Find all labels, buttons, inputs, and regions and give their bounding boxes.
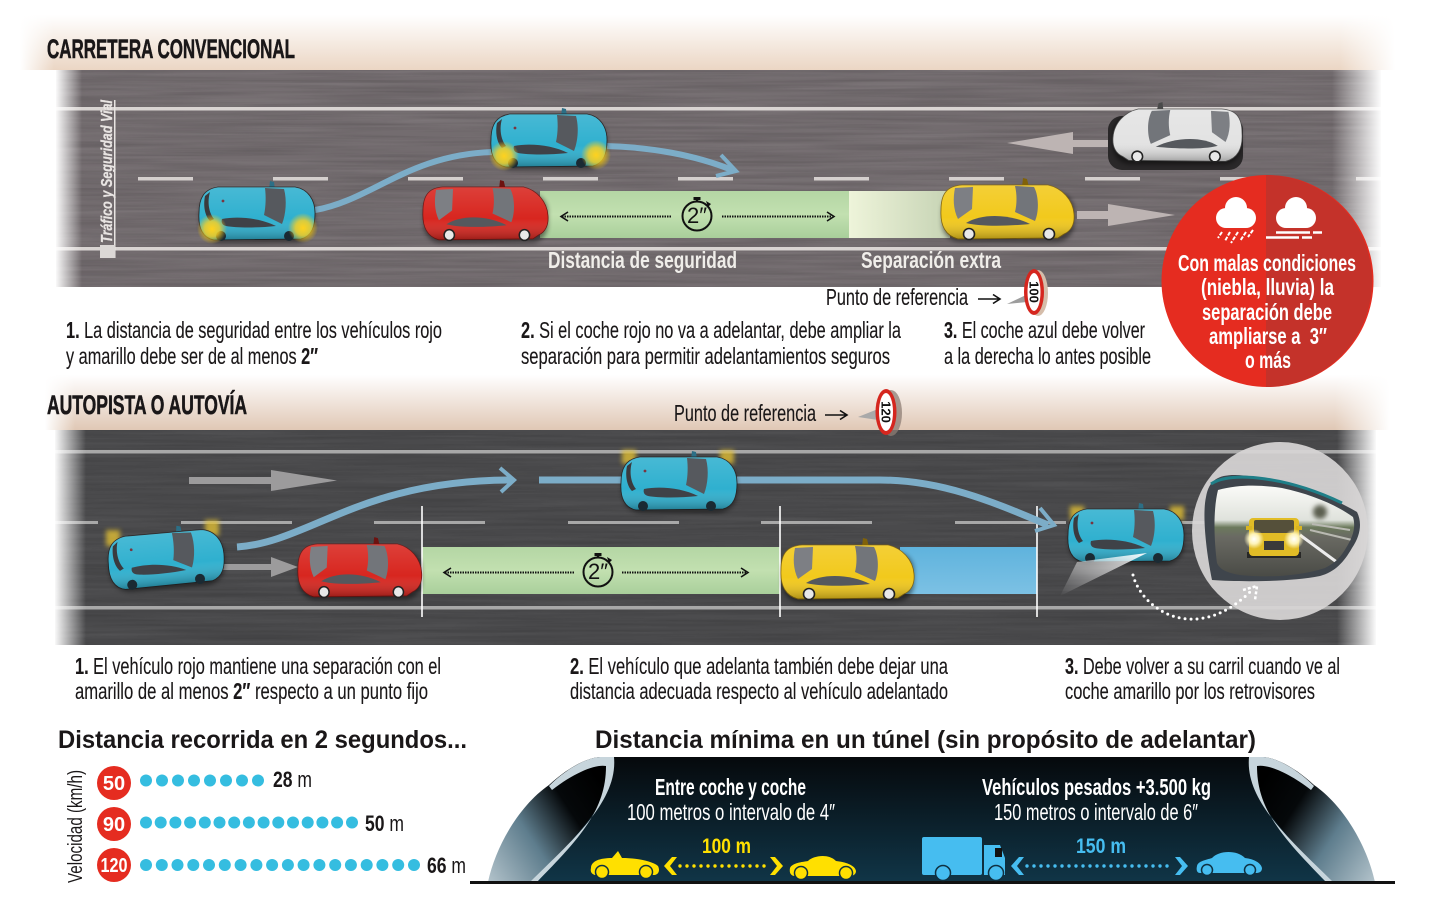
credit: Tráfico y Seguridad Vial: Tráfico y Seguridad Vial: [99, 99, 116, 243]
tunnel text: heavy vehicles: [982, 774, 1211, 825]
car: yellow, motorway: [781, 538, 914, 602]
indicator glows: [106, 450, 1184, 546]
reference lines: [422, 506, 1037, 617]
road section: carretera convencional: [20, 15, 1395, 287]
step 1: 1. La distancia de seguridad entre los vehículos rojo: [66, 317, 442, 343]
blue overtaking path: motorway: [237, 468, 1054, 547]
safety distance zone: [540, 191, 950, 238]
callout text: ampliarse a 3″: [1209, 323, 1327, 349]
callout text: (niebla, lluvia) la: [1201, 274, 1334, 300]
tunnel text: heavy vehicles: Vehículos pesados +3.500 kg: [982, 774, 1211, 800]
chart row: 50 km/h: [97, 766, 312, 800]
callout text: separación debe: [1202, 299, 1332, 325]
step 3: 3. Debe volver a su carril cuando ve al: [1065, 653, 1340, 679]
reference point: sign 100: 100: [1026, 281, 1042, 303]
tunnel text: cars: 100 metros o intervalo de 4″: [627, 799, 835, 825]
tunnel text: cars: Entre coche y coche: [655, 774, 806, 800]
reference point: sign 120: 120: [878, 401, 894, 423]
car: blue overtaking: [491, 108, 607, 170]
step 1: amarillo de al menos 2″ respecto a un punto fijo: [75, 678, 428, 704]
car: blue start, motorway: [105, 522, 227, 594]
arrow: oncoming direction: [1007, 132, 1108, 154]
chart row: 90 km/h: 90: [103, 814, 125, 836]
arrow: lower lane direction: [223, 557, 298, 577]
reflected yellow car: [1244, 505, 1352, 563]
callout text: o más: [1245, 347, 1291, 373]
label: distancia de seguridad: Distancia de seguridad: [548, 247, 737, 273]
distance: 150 m: [1011, 835, 1188, 875]
icon: yellow coupe: [790, 856, 856, 880]
tunnel text: heavy vehicles: 150 metros o intervalo de 6″: [994, 799, 1198, 825]
step 3: coche amarillo por los retrovisores: [1065, 678, 1315, 704]
car: white oncoming: [1108, 102, 1243, 170]
distance: 100 m: 100 m: [702, 835, 751, 858]
car: red: [423, 180, 548, 243]
step 2: 2. El vehículo que adelanta también debe dejar una: [570, 653, 948, 679]
callout text: [1178, 250, 1356, 373]
arrow: upper lane direction: [189, 470, 337, 491]
heading: tunnel: Distancia mínima en un túnel (sin propósito de adelantar): [595, 726, 1256, 754]
icon: blue car: [1197, 852, 1262, 876]
step 3: a la derecha lo antes posible: [944, 343, 1151, 369]
mirror view beam: [1060, 553, 1147, 596]
dotted arrows with stopwatch: 2 seconds: [561, 197, 834, 230]
chart row: 90 km/h: [97, 807, 404, 841]
icon: rain cloud: [1216, 197, 1256, 243]
distance: 150 m: 150 m: [1076, 835, 1126, 858]
dotted arrows with stopwatch: 2 seconds: [444, 553, 748, 586]
reference point: sign 100: [826, 269, 1048, 316]
axis label: velocidad: Velocidad (km/h): [65, 770, 87, 883]
arrow: yellow car direction: [1077, 204, 1175, 226]
step 2: [521, 317, 901, 369]
label: separación extra: Separación extra: [861, 247, 1001, 273]
reference point: sign 120: [674, 389, 902, 436]
callout: bad weather: [1162, 175, 1374, 387]
step 2: 2. Si el coche rojo no va a adelantar, debe ampliar la: [521, 317, 901, 343]
tunnel text: cars: [627, 774, 835, 825]
distance: 100 m: [664, 835, 783, 875]
callout text: Con malas condiciones: [1178, 250, 1356, 276]
title: autopista o autovía: AUTOPISTA O AUTOVÍA: [47, 389, 247, 420]
title: carretera convencional: CARRETERA CONVENCIONAL: [47, 34, 295, 64]
road section: autopista o autovía: [45, 375, 1390, 645]
step 1: [66, 317, 442, 369]
step 2: [570, 653, 948, 704]
step 3: [1065, 653, 1340, 704]
reference point: sign 120: Punto de referencia: [674, 400, 816, 426]
chart row: 50 km/h: 28 m: [273, 767, 312, 792]
car: yellow: [941, 178, 1074, 242]
chart row: 120 km/h: 66 m: [427, 853, 466, 878]
icon: truck: [922, 837, 1005, 880]
car: blue returning: [1068, 503, 1184, 565]
tunnel portal: right: [1249, 757, 1375, 882]
tunnel illustration: [470, 757, 1395, 884]
tunnel portal: left: [488, 757, 614, 882]
step 2: separación para permitir adelantamientos seguros: [521, 343, 890, 369]
step 3: [944, 317, 1151, 369]
chart row: 120 km/h: 120: [100, 855, 128, 877]
step 1: 1. El vehículo rojo mantiene una separación con el: [75, 653, 441, 679]
chart row: 120 km/h: [97, 848, 466, 882]
rear-view mirror inset: [1192, 442, 1368, 620]
step 1: [75, 653, 441, 704]
headlights: blue start: [197, 213, 318, 244]
step 2: distancia adecuada respecto al vehículo adelantado: [570, 678, 948, 704]
step 1: y amarillo debe ser de al menos 2″: [66, 343, 318, 369]
icon: yellow convertible: [591, 851, 659, 878]
step 3: 3. El coche azul debe volver: [944, 317, 1145, 343]
car: blue overtaking, motorway: [621, 451, 737, 513]
dotted return arrow: [1133, 575, 1257, 619]
headlights: blue overtaking: [489, 140, 611, 171]
ground line: [470, 881, 1395, 884]
steps: autopista o autovía: [75, 653, 1340, 704]
safety distance zone: motorway: [422, 547, 1037, 594]
chart row: 50 km/h: 50: [103, 773, 125, 795]
heading: distance in 2 seconds: Distancia recorrida en 2 segundos...: [58, 726, 467, 754]
chart row: 90 km/h: 50 m: [365, 811, 404, 836]
steps: carretera convencional: [66, 317, 1151, 369]
car: red, motorway: [298, 537, 422, 600]
car: blue start: [199, 181, 315, 243]
reference point: sign 100: Punto de referencia: [826, 284, 968, 310]
icon: fog cloud: [1266, 197, 1322, 238]
blue overtaking path: [315, 146, 736, 210]
